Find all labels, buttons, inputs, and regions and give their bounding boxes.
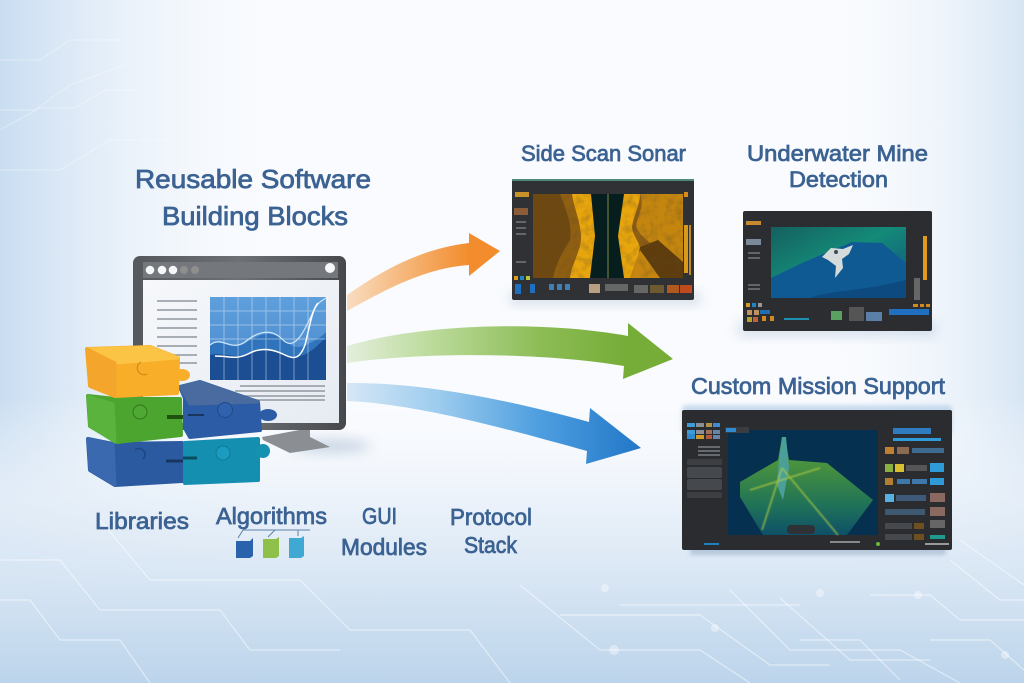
- block: blue bottom left: [88, 439, 183, 485]
- title: Reusable Software Building Blocks: [135, 164, 371, 231]
- sonar image: [533, 194, 683, 278]
- labels: building block categories: Stack: [464, 532, 517, 558]
- block: green: [88, 396, 183, 442]
- arrow: green to underwater mine detection: [347, 323, 673, 379]
- heading: underwater mine detection: Detection: [789, 167, 888, 192]
- labels: building block categories: Algorithms: [216, 503, 327, 529]
- labels: building block categories: Modules: [341, 534, 427, 560]
- labels: building block categories: Protocol: [450, 504, 532, 530]
- heading: side scan sonar: Side Scan Sonar: [521, 141, 686, 166]
- mission status bar: [704, 541, 949, 546]
- title: Reusable Software Building Blocks: Building Blocks: [162, 201, 348, 231]
- panel: side scan sonar screen: [510, 179, 700, 304]
- panel: underwater mine detection screen: [738, 211, 936, 336]
- heading: custom mission support: Custom Mission Support: [691, 373, 946, 399]
- title: Reusable Software Building Blocks: Reusable Software: [135, 164, 371, 194]
- block: orange: [87, 347, 190, 396]
- window buttons: [146, 263, 335, 274]
- line chart: [210, 297, 326, 380]
- mission controls right: [885, 428, 945, 540]
- text lines: [157, 301, 325, 400]
- labels: building block categories: Libraries: [95, 508, 189, 534]
- block: teal bottom right: [183, 439, 270, 483]
- monitor: [133, 256, 370, 453]
- sonar controls: [514, 192, 692, 294]
- puzzle blocks: [87, 347, 277, 485]
- arrow: blue to custom mission support: [347, 383, 641, 464]
- icon: algorithm cubes: [236, 530, 310, 558]
- heading: underwater mine detection: [747, 141, 928, 192]
- mine controls: [746, 221, 930, 322]
- bathymetry image: [728, 430, 878, 535]
- block: blue right: [180, 382, 277, 437]
- monitor stand: [262, 428, 330, 453]
- mine image: [771, 227, 906, 298]
- panel: custom mission support screen: [682, 405, 952, 555]
- mission controls left: [687, 423, 749, 498]
- arrow: orange to side scan sonar: [347, 233, 500, 311]
- labels: building block categories: GUI: [362, 503, 397, 529]
- heading: underwater mine detection: Underwater Mine: [747, 141, 928, 166]
- labels: building block categories: [95, 503, 532, 560]
